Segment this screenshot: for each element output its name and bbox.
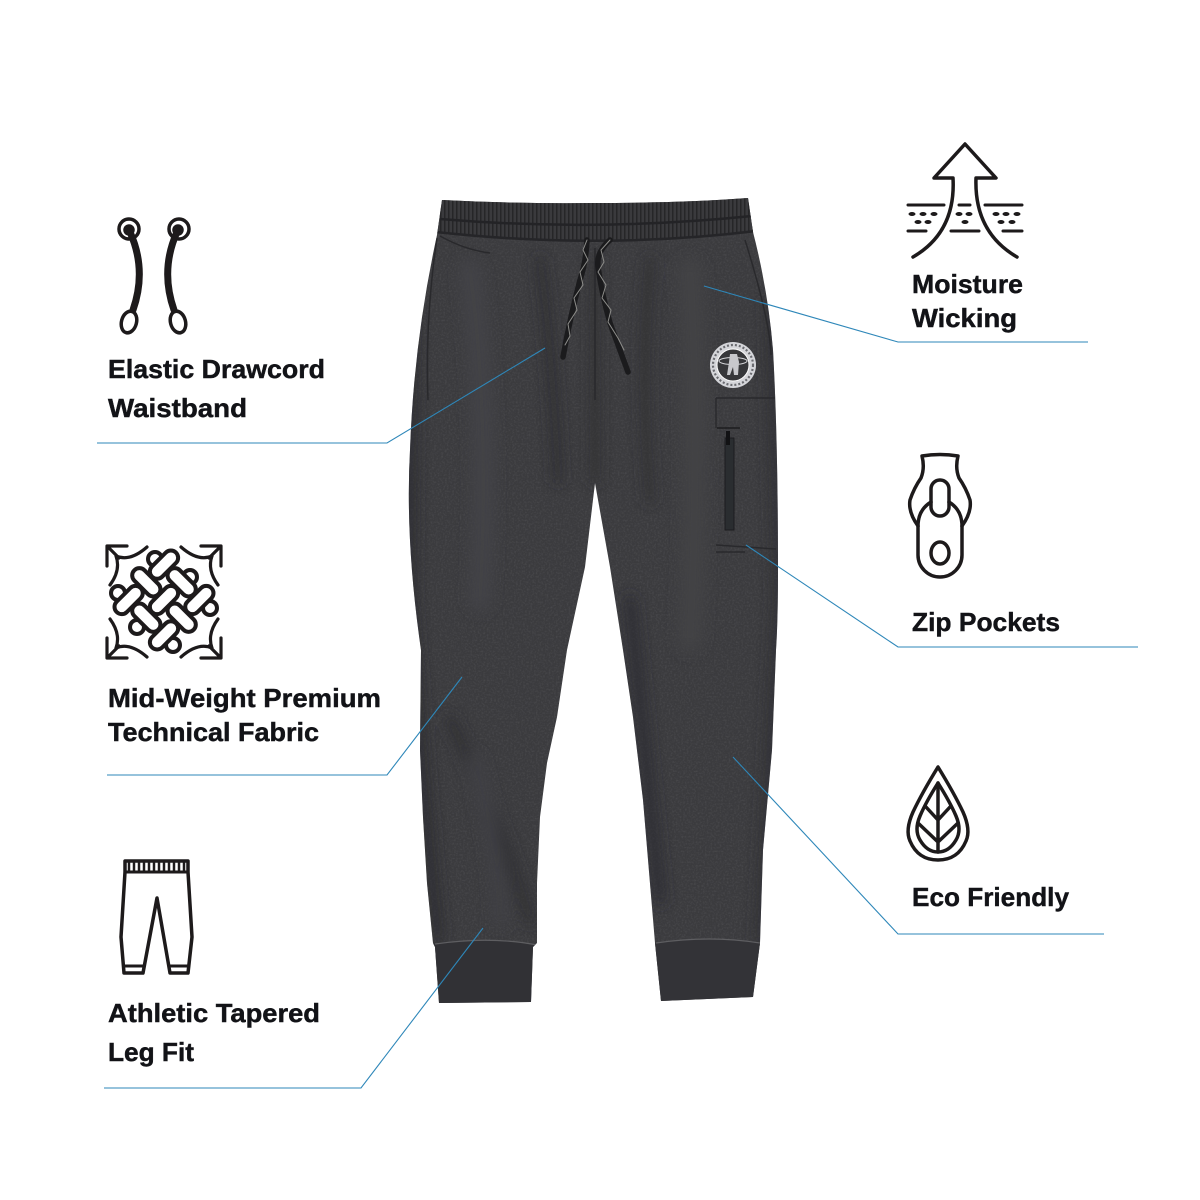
- heading: mid-weight premium technical fabric: [108, 683, 381, 747]
- icon: woven fabric: [105, 541, 223, 659]
- heading: mid-weight premium technical fabric: Mid-Weight Premium: [108, 683, 381, 713]
- leader line: elastic drawcord: [97, 348, 545, 443]
- icon: tapered pants: [121, 861, 192, 973]
- zip pocket: [716, 398, 776, 552]
- heading: mid-weight premium technical fabric: Technical Fabric: [108, 717, 319, 747]
- leader line: fabric: [107, 677, 462, 775]
- side pocket seams: [427, 236, 771, 400]
- heading: moisture wicking: [912, 269, 1023, 333]
- leader line: eco friendly: [733, 757, 1104, 934]
- heading: athletic tapered leg fit: Leg Fit: [108, 1037, 194, 1067]
- leader line: tapered fit: [104, 928, 483, 1088]
- icon: elastic drawcord: [119, 219, 189, 335]
- leader line: zip pockets: [746, 545, 1138, 647]
- leader line: moisture wicking: [704, 286, 1088, 342]
- heading: elastic drawcord waistband: [108, 354, 325, 423]
- heading: zip pockets: Zip Pockets: [912, 607, 1060, 637]
- heading: elastic drawcord waistband: Elastic Drawcord: [108, 354, 325, 384]
- heading: athletic tapered leg fit: [108, 998, 320, 1067]
- heading: eco friendly: Eco Friendly: [912, 882, 1070, 912]
- heading: moisture wicking: Moisture: [912, 269, 1023, 299]
- heading: elastic drawcord waistband: Waistband: [108, 393, 247, 423]
- heading: moisture wicking: Wicking: [912, 303, 1017, 333]
- cuffs: [433, 941, 535, 1003]
- pants photo illustration: [400, 190, 790, 1010]
- icon: zipper pull: [910, 454, 970, 577]
- heading: athletic tapered leg fit: Athletic Tapered: [108, 998, 320, 1028]
- infographic: jogger pants feature diagram: [97, 142, 1138, 1088]
- icon: eco leaf drop: [908, 767, 968, 860]
- waistband: [434, 196, 756, 241]
- drawcord: [563, 240, 628, 372]
- icon: moisture wicking arrow: [908, 144, 1022, 257]
- chest badge: [710, 342, 756, 388]
